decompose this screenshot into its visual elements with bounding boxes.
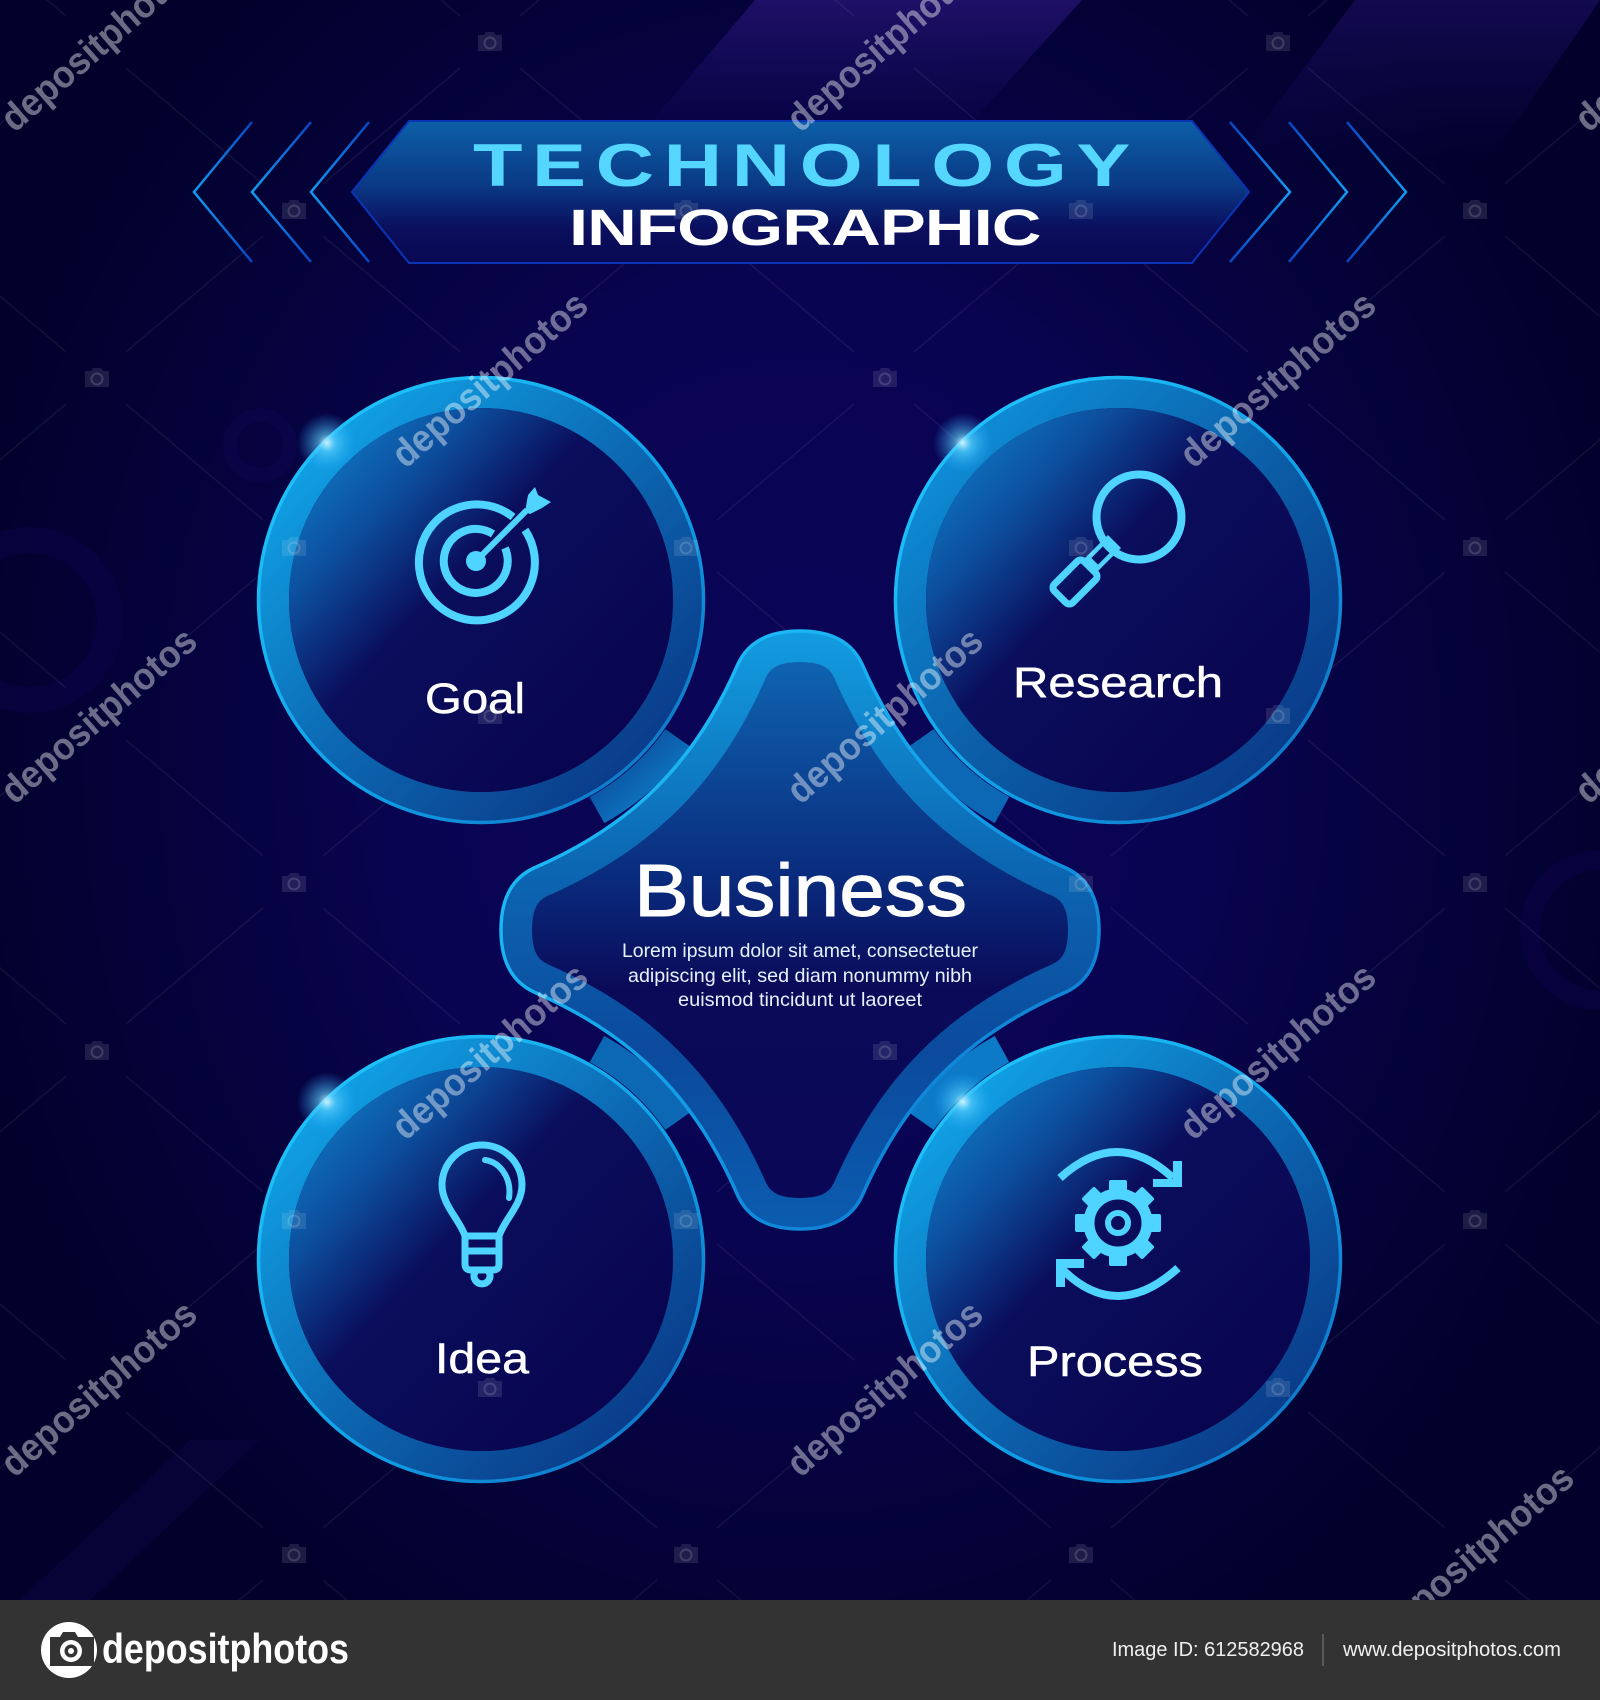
footer image id: Image ID: 612582968 bbox=[1112, 1639, 1304, 1661]
footer brand name: depositphotos bbox=[102, 1625, 349, 1672]
icon: magnifying glass bbox=[1051, 474, 1182, 606]
label: goal: Goal bbox=[425, 675, 525, 723]
watermark text: depositphotos bbox=[779, 620, 991, 812]
heading: business: Business bbox=[634, 849, 967, 932]
connector arcs between circles and centre bbox=[597, 738, 1002, 1121]
text block: lorem ipsum bbox=[622, 940, 979, 1011]
label: idea: Idea bbox=[435, 1335, 529, 1383]
watermark text: depositphotos bbox=[384, 956, 596, 1148]
watermark text: depositphotos bbox=[1172, 284, 1384, 476]
watermark text: depositphotos bbox=[779, 1293, 991, 1485]
footer website: www.depositphotos.com bbox=[1342, 1639, 1561, 1661]
header banner bbox=[352, 121, 1249, 263]
watermark cameras bbox=[85, 32, 1487, 1563]
icon: gear with cycle arrows bbox=[1056, 1152, 1182, 1296]
text block: lorem ipsum: adipiscing elit, sed diam nonummy nibh bbox=[628, 965, 972, 987]
watermark text: depositphotos bbox=[1172, 956, 1384, 1148]
title: technology: TECHNOLOGY bbox=[473, 132, 1130, 199]
text block: lorem ipsum: Lorem ipsum dolor sit amet, consectetuer bbox=[622, 940, 979, 962]
icon: footer logo bbox=[41, 1622, 97, 1678]
label: research: Research bbox=[1013, 659, 1223, 707]
panel: process bbox=[896, 1036, 1340, 1482]
icon: target with dart bbox=[419, 487, 551, 620]
footer bar bbox=[0, 1600, 1600, 1700]
label: process: Process bbox=[1027, 1338, 1203, 1386]
title: infographic: INFOGRAPHIC bbox=[569, 199, 1041, 256]
icon: light bulb bbox=[442, 1145, 522, 1284]
header chevrons left bbox=[194, 122, 369, 262]
text block: lorem ipsum: euismod tincidunt ut laoreet bbox=[678, 989, 923, 1011]
watermark text: depositphotos bbox=[384, 284, 596, 476]
panel: business centre shape bbox=[501, 631, 1099, 1229]
panel: idea bbox=[258, 1036, 704, 1482]
panel: goal bbox=[258, 378, 704, 822]
watermark text: depositphotos bbox=[1370, 1457, 1582, 1649]
panel: research bbox=[896, 378, 1340, 822]
header chevrons right bbox=[1230, 122, 1406, 262]
